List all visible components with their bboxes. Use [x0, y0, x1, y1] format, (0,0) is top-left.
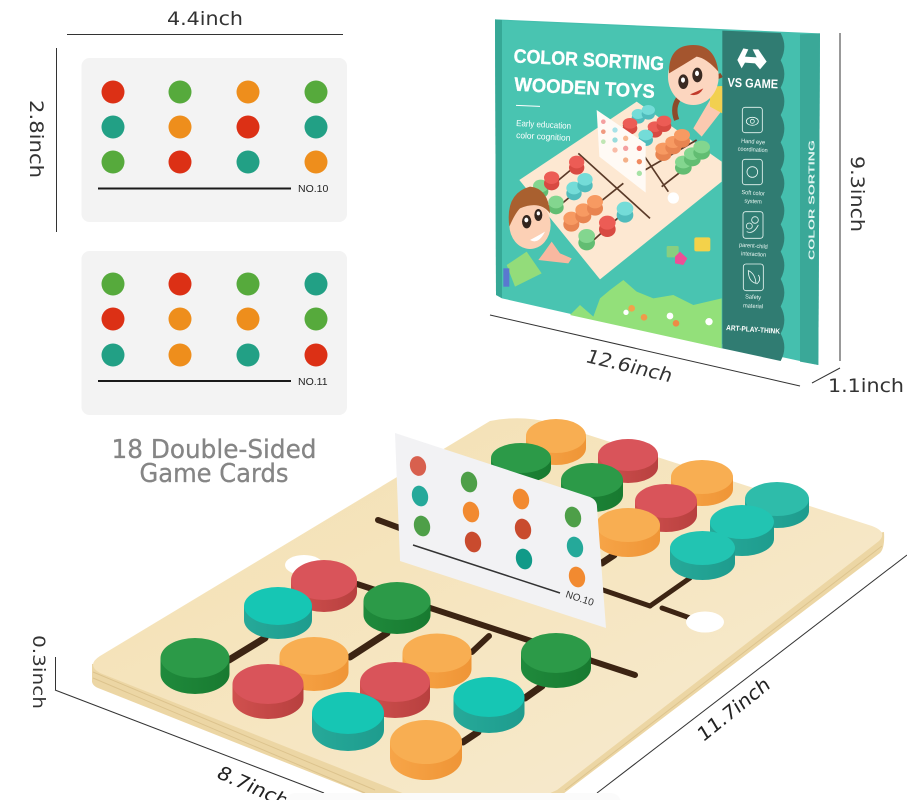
box subtitle: [516, 105, 572, 143]
standing pattern card NO.10: NO.10: [564, 589, 595, 609]
dimension: box width 12.6inch: [490, 315, 800, 387]
feature: parent-child interaction: [739, 212, 768, 259]
feature: safety material: material: [743, 303, 763, 310]
dimension: board thickness 0.3inch: 0.3inch: [28, 635, 48, 709]
slots: [229, 520, 690, 742]
game card NO.10: NO.10: [298, 183, 329, 195]
dimension: board thickness 0.3inch: [28, 635, 56, 709]
feature: hand eye coordination: coordination: [738, 147, 768, 154]
game card NO.11: [82, 251, 347, 415]
feature: parent-child interaction: parent-child: [739, 243, 768, 251]
feature: hand eye coordination: Hand eye: [741, 139, 766, 146]
game card NO.11: NO.11: [298, 376, 328, 388]
front-side pieces: [160, 560, 591, 780]
board face: [93, 418, 882, 800]
caption: 18 double-sided game cards: Game Cards: [140, 459, 288, 489]
illustrated pieces: [533, 105, 710, 250]
feature: hand eye coordination: [738, 107, 768, 154]
grass illustration: [570, 280, 722, 348]
spine title: COLOR SORTING: [807, 140, 817, 260]
dimension: box depth 1.1inch: 1.1inch: [828, 375, 904, 397]
box title: WOODEN TOYS: [514, 75, 655, 103]
feature: soft color system: [741, 159, 765, 206]
dimension: board depth 8.7inch: [55, 690, 324, 800]
feature: soft color system: Soft color: [741, 190, 765, 198]
box title: [513, 46, 665, 103]
game card NO.10: [82, 58, 347, 222]
illustration: boy: [503, 187, 572, 287]
white holes: [285, 555, 724, 632]
feature: safety material: [743, 264, 763, 310]
feature: parent-child interaction: interaction: [741, 251, 766, 259]
dimension: card width 4.4inch: 4.4inch: [167, 8, 243, 30]
standing pattern card NO.10: [395, 433, 606, 628]
wooden game board: [92, 418, 884, 800]
illustrated white hole: [668, 192, 679, 204]
box front face: [502, 21, 722, 348]
slogan: ART-PLAY-THINK: [726, 323, 781, 336]
box subtitle: Early education: [516, 118, 572, 131]
dimension: board length 11.7inch: 11.7inch: [693, 672, 774, 747]
feature: soft color system: system: [744, 199, 762, 206]
icon: two hands VS: [737, 48, 767, 69]
dimension: card height 2.8inch: 2.8inch: [25, 100, 47, 178]
dimension: box width 12.6inch: 12.6inch: [582, 345, 676, 387]
back-side pieces: [491, 419, 809, 580]
illustration: girl: [668, 45, 723, 137]
illustrated pattern card: [597, 110, 646, 193]
board side: [92, 532, 884, 800]
VS GAME label: VS GAME: [727, 76, 778, 91]
illustration: toy blocks: [667, 237, 710, 265]
box body: [495, 19, 820, 365]
dimension: box height 9.3inch: 9.3inch: [846, 156, 868, 232]
box spine: [800, 33, 820, 365]
caption: 18 double-sided game cards: [112, 435, 316, 489]
dimension: board length 11.7inch: [597, 555, 907, 793]
dark side panel: [722, 31, 784, 361]
illustrated slots: [547, 125, 700, 243]
caption: 18 double-sided game cards: 18 Double-Sided: [112, 435, 316, 465]
feature: safety material: Safety: [745, 294, 761, 301]
illustrated board: [519, 102, 722, 279]
box left flap: [495, 19, 502, 298]
flowers: [623, 305, 713, 327]
box title: COLOR SORTING: [513, 46, 665, 75]
box subtitle: color cognition: [516, 130, 571, 143]
bottom overlay bar: [285, 793, 621, 800]
product box: [495, 19, 820, 365]
dimension: box depth 1.1inch: [812, 368, 904, 397]
plywood layers: [93, 546, 882, 793]
